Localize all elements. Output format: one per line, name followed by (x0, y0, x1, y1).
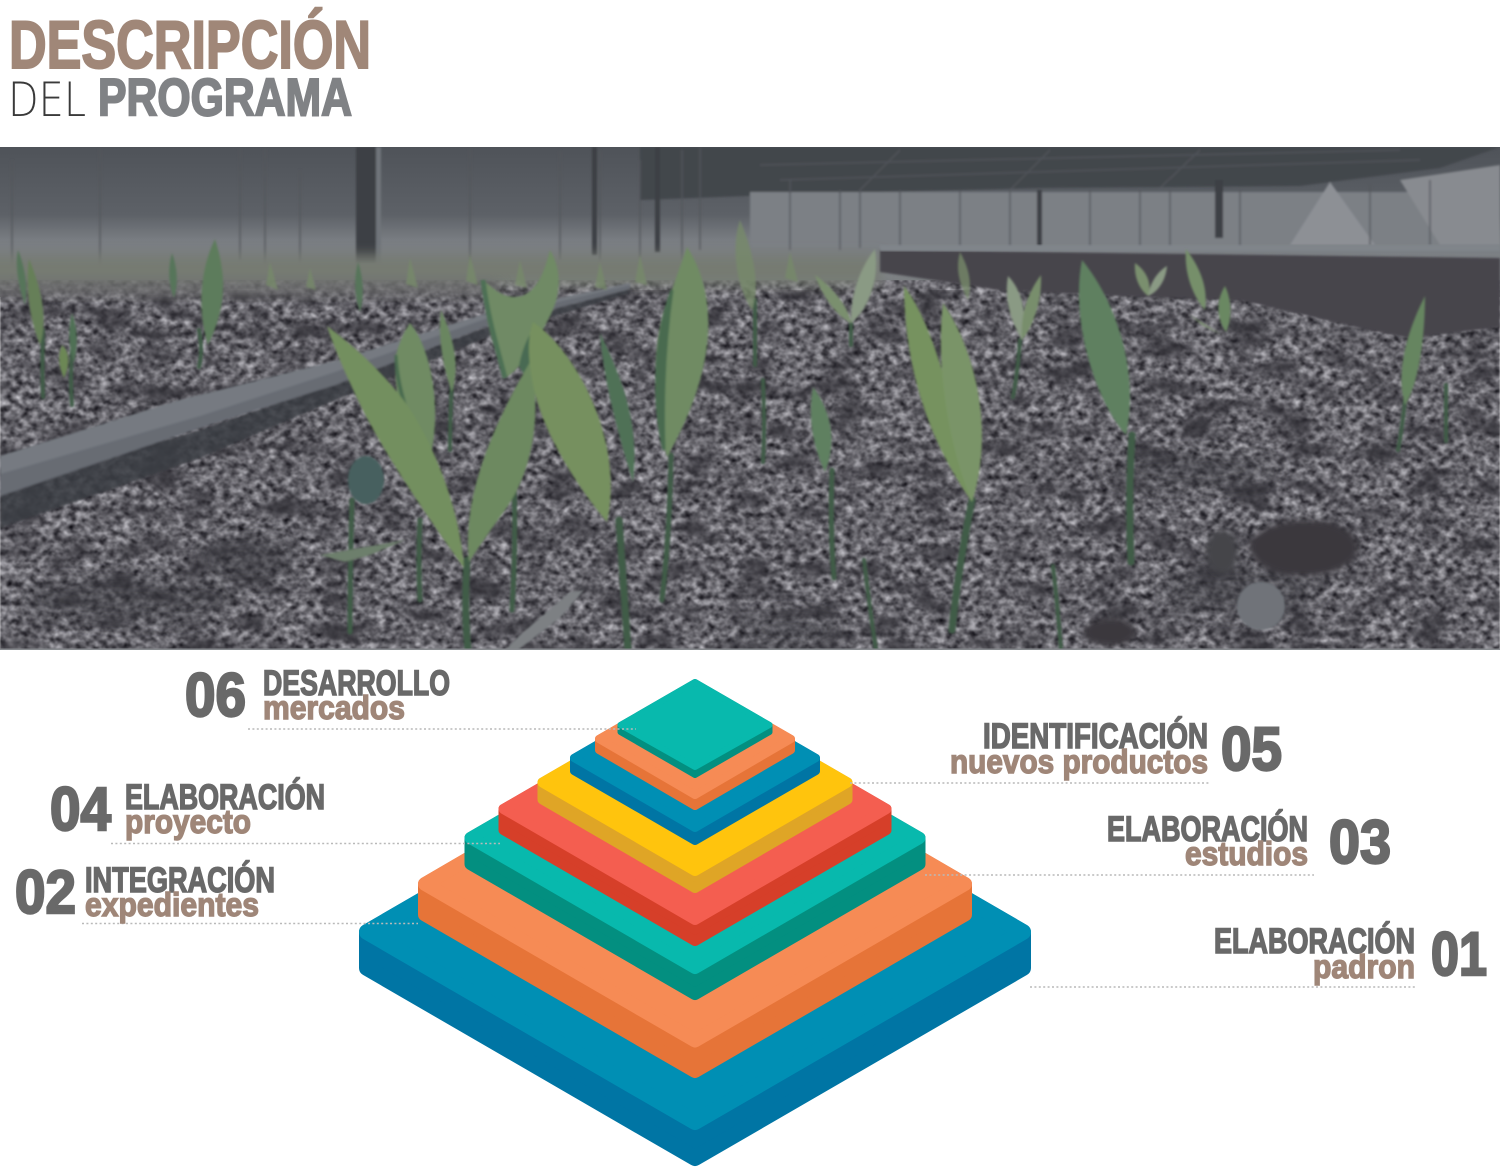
label 06 desarrollo mercados: 06 (185, 661, 246, 729)
soil texture (0, 280, 1500, 650)
tier 1: blue base (367, 742, 1023, 1158)
label 05 identificacion nuevos productos (950, 715, 1282, 783)
broad centre leaf (529, 322, 611, 522)
irrigation pipe (0, 283, 630, 528)
tier 8: teal top (620, 682, 770, 775)
plant right of centre (656, 247, 708, 457)
label 02 integracion expedientes (15, 858, 275, 926)
label 04 elaboracion proyecto: proyecto (125, 803, 251, 840)
label 02 integracion expedientes: expedientes (85, 886, 259, 923)
label 05 identificacion nuevos productos: nuevos productos (950, 743, 1208, 780)
title (8, 7, 371, 128)
label 03 elaboracion estudios (1107, 808, 1391, 876)
label 03 elaboracion estudios: estudios (1185, 835, 1308, 872)
right plants (904, 286, 972, 502)
tier 2: orange (425, 727, 965, 1071)
label 06 desarrollo mercados: mercados (263, 689, 405, 726)
label 04 elaboracion proyecto (50, 775, 325, 843)
label 03 elaboracion estudios: 03 (1329, 808, 1391, 876)
label 06 desarrollo mercados: DESARROLLO (263, 664, 450, 703)
tier 4: red (504, 698, 886, 941)
title: DEL (8, 73, 86, 128)
mid plant behind (395, 323, 435, 458)
title: DESCRIPCIÓN (9, 7, 371, 83)
label 06 desarrollo mercados (185, 661, 450, 729)
title: PROGRAMA (98, 68, 352, 128)
long left leaf (327, 326, 464, 568)
label 03 elaboracion estudios: ELABORACIÓN (1107, 809, 1308, 849)
label 04 elaboracion proyecto: ELABORACIÓN (125, 777, 325, 817)
upper centre leaf cluster (483, 250, 559, 378)
label 04 elaboracion proyecto: 04 (50, 775, 111, 843)
label 01 elaboracion padron: padron (1313, 948, 1415, 985)
lower middle leaf (468, 362, 535, 562)
tier 6: blue (574, 688, 816, 841)
hazy horizon strip (0, 255, 880, 285)
tier 7: orange (599, 684, 791, 806)
label 05 identificacion nuevos productos: 05 (1221, 715, 1282, 783)
label 02 integracion expedientes: INTEGRACIÓN (85, 860, 275, 900)
label 01 elaboracion padron: ELABORACIÓN (1214, 921, 1415, 961)
label 01 elaboracion padron: 01 (1431, 920, 1487, 988)
label 01 elaboracion padron (1214, 920, 1487, 988)
far row (266, 220, 970, 310)
tier 5: yellow (542, 694, 848, 888)
photo: seedlings in greenhouse (0, 147, 1500, 650)
tier 3: teal (470, 708, 920, 994)
small left plants (28, 259, 44, 345)
label 05 identificacion nuevos productos: IDENTIFICACIÓN (983, 716, 1208, 756)
raised bed wall (880, 250, 1500, 338)
pyramid (367, 682, 1023, 1158)
seedlings (17, 220, 1446, 650)
label 02 integracion expedientes: 02 (15, 858, 76, 926)
